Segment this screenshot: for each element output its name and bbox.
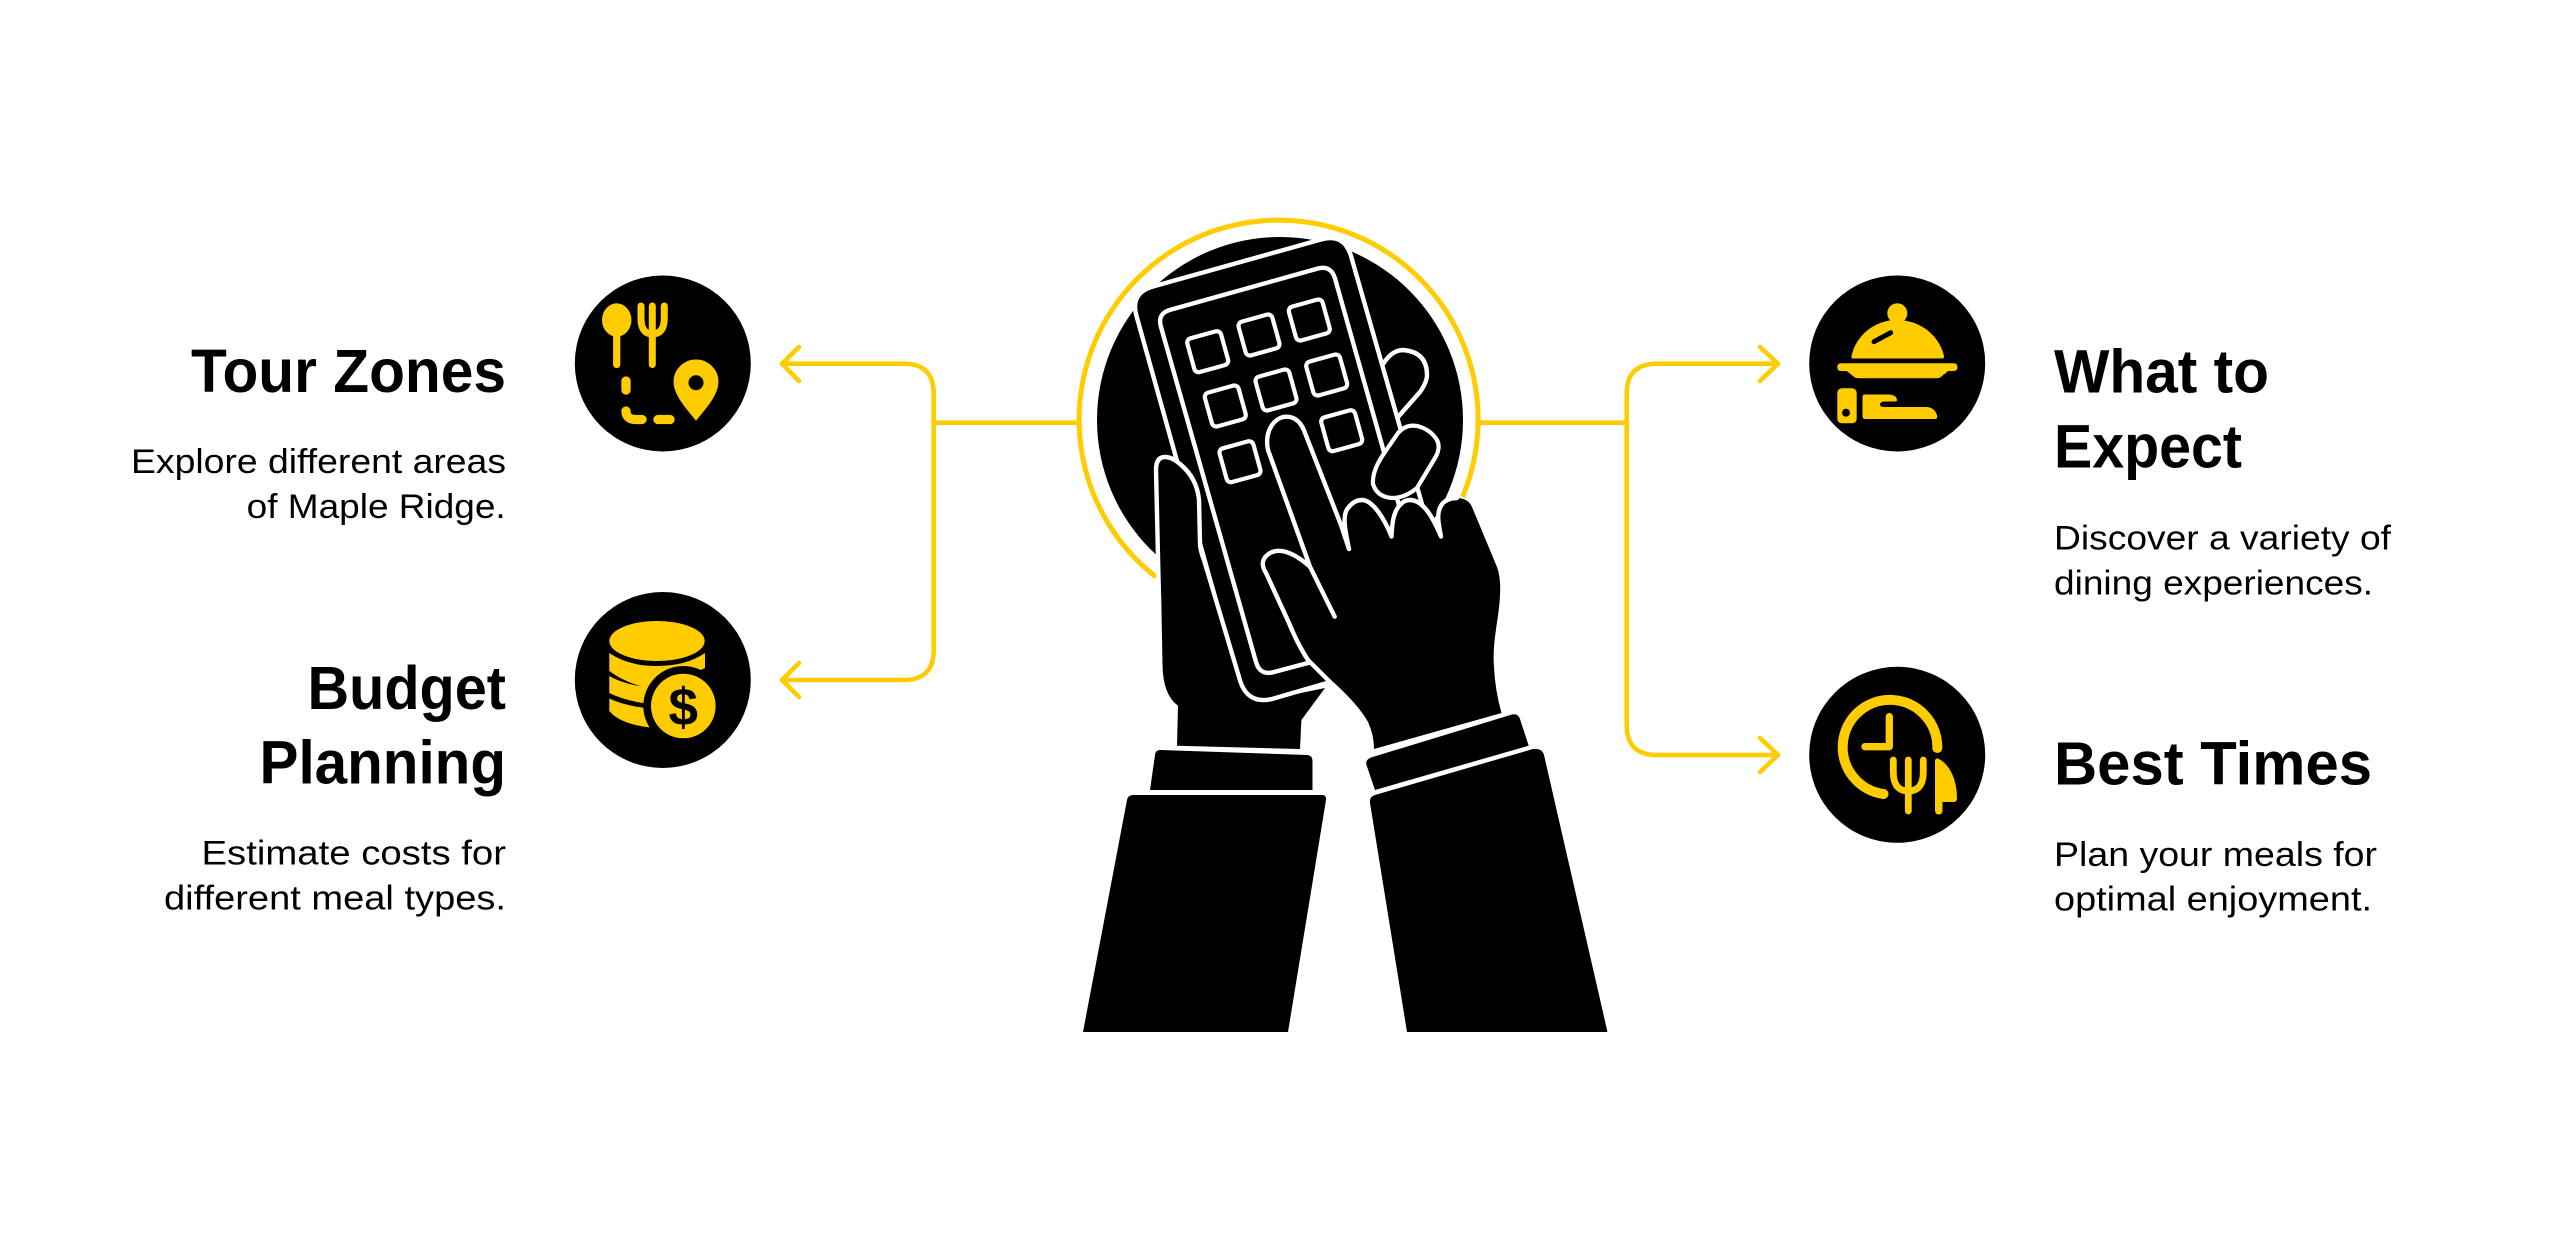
description: budget planning [164, 834, 506, 917]
heading: budget planning: Budget [308, 654, 506, 722]
description: budget planning: Estimate costs for [202, 834, 506, 872]
heading: budget planning [260, 654, 506, 797]
yellow ring [1079, 220, 1478, 577]
left sleeve [1083, 795, 1326, 1032]
black disc behind phone [1097, 237, 1463, 603]
text block: best times [2054, 730, 2377, 918]
description: tour zones: Explore different areas [131, 443, 506, 481]
right hand [1263, 417, 1502, 749]
right cuff [1366, 714, 1529, 790]
description: budget planning: different meal types. [164, 879, 506, 917]
description: what to expect: dining experiences. [2054, 564, 2373, 602]
description: best times [2054, 836, 2377, 918]
heading: what to expect: What to [2054, 338, 2269, 406]
arrow connector: right branches [1480, 347, 1778, 772]
central illustration: hands holding a phone [1079, 220, 1608, 1032]
phone body [1135, 238, 1462, 701]
description: best times: optimal enjoyment. [2054, 880, 2372, 918]
icon: budget planning [575, 592, 751, 768]
description: best times: Plan your meals for [2054, 836, 2377, 874]
fingertip behind phone [1383, 350, 1427, 417]
icon: best times [1809, 667, 1985, 843]
description: what to expect: Discover a variety of [2054, 520, 2391, 558]
right sleeve [1370, 749, 1608, 1032]
arrow connector: left branches [782, 347, 1078, 697]
icon: budget planning: $ [669, 678, 698, 737]
text block: tour zones [131, 337, 506, 526]
heading: what to expect: Expect [2054, 412, 2242, 480]
phone screen [1160, 268, 1434, 673]
icon: tour zones [575, 276, 751, 452]
description: tour zones: of Maple Ridge. [247, 488, 506, 526]
left hand [1156, 457, 1327, 749]
icon: what to expect [1809, 276, 1985, 452]
text block: budget planning [164, 654, 506, 917]
heading: what to expect [2054, 338, 2269, 480]
heading: tour zones: Tour Zones [191, 337, 506, 405]
description: what to expect [2054, 520, 2391, 602]
left cuff [1150, 750, 1312, 790]
heading: best times: Best Times [2054, 730, 2372, 798]
finger pad [1373, 426, 1439, 498]
text block: what to expect [2054, 338, 2391, 602]
phone keypad keys [1186, 298, 1363, 483]
heading: budget planning: Planning [260, 729, 506, 797]
description: tour zones [131, 443, 506, 526]
